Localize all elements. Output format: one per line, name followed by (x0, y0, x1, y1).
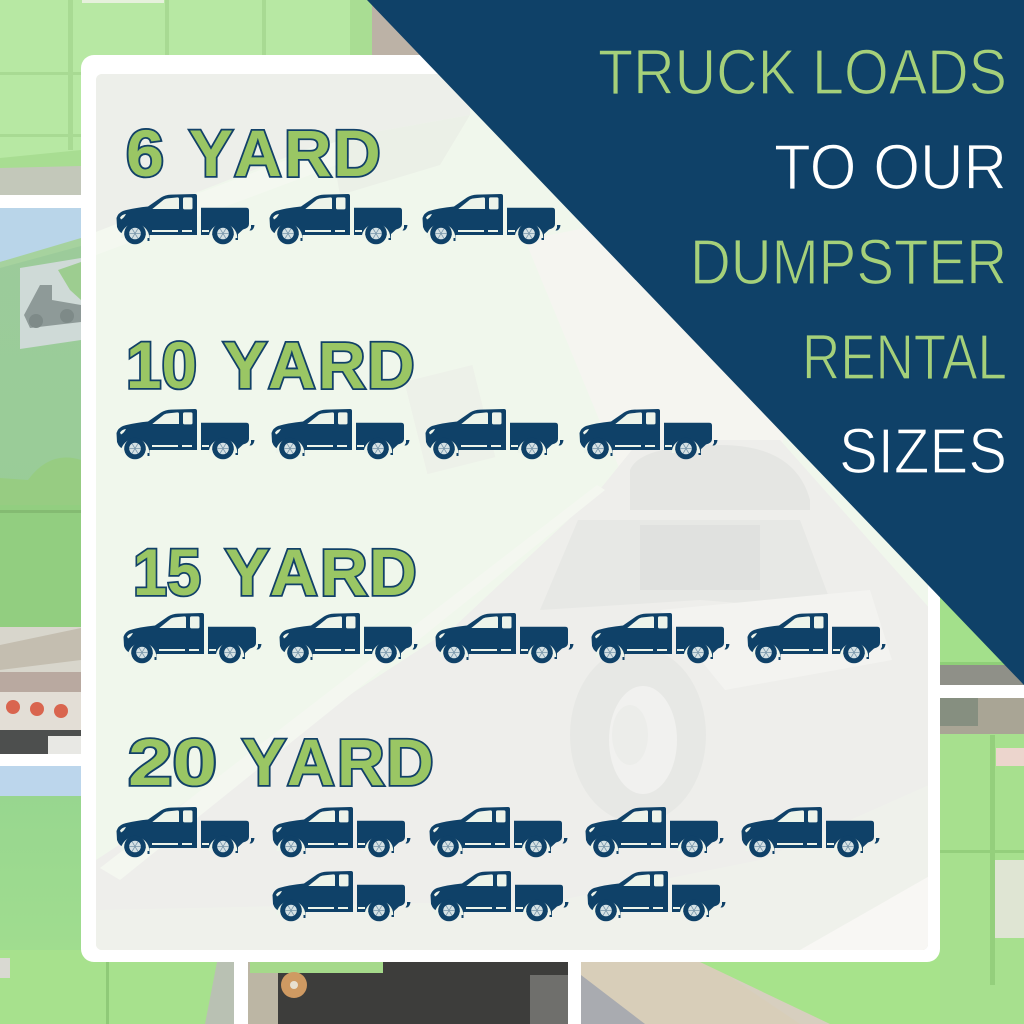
photo tile: green dumpster right (940, 698, 1024, 1024)
truck icons: 5 loads (124, 613, 886, 663)
photo tile: dumpster side with sign and trailer lights (0, 208, 81, 754)
section: 6 yard (116, 116, 560, 244)
photo tile: green dumpster bottom left (0, 766, 234, 1024)
heading: 15 yard (133, 535, 417, 609)
truck icons: 3 loads (116, 194, 560, 244)
truck icons: 8 loads (116, 807, 880, 921)
section: 15 yard (124, 535, 886, 663)
navy corner triangle (367, 0, 1024, 685)
photo tile: dark truck underside (248, 962, 568, 1024)
photo tile: dumpster on driveway (581, 930, 1024, 1024)
title (598, 36, 1007, 487)
photo tile: green dumpster top left (0, 0, 432, 195)
section: 10 yard (116, 328, 718, 459)
heading: 10 yard: 10 (126, 328, 197, 402)
heading: 20 yard (128, 725, 434, 799)
heading: 15 yard: YARD (225, 535, 417, 609)
truck icons: 4 loads (116, 409, 718, 459)
title: SIZES (839, 415, 1007, 487)
heading: 10 yard (126, 328, 415, 402)
title: TO OUR (774, 131, 1007, 203)
heading: 20 yard: 20 (128, 725, 217, 799)
panel: white frame with faded photo (81, 55, 940, 962)
heading: 6 yard: 6 (126, 116, 164, 190)
section: 20 yard (116, 725, 880, 921)
heading: 15 yard: 15 (133, 535, 201, 609)
heading: 6 yard: YARD (189, 116, 381, 190)
photo tile: upper right dumpster (940, 590, 1024, 685)
heading: 10 yard: YARD (223, 328, 415, 402)
heading: 20 yard: YARD (242, 725, 434, 799)
